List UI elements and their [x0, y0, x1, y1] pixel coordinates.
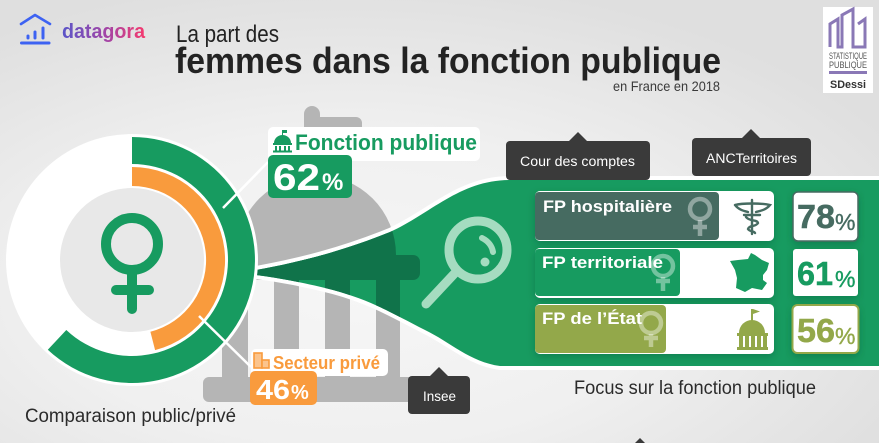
row: FP territoriale: FP territoriale — [542, 253, 663, 272]
tooltip: ANCTerritoires: ANCTerritoires — [706, 151, 797, 166]
title — [175, 21, 721, 94]
tooltip: cour des comptes — [506, 132, 650, 180]
logo: datagora: datagora — [62, 21, 146, 43]
row: FP hospitalière: FP hospitalière — [543, 197, 672, 216]
icon: office building — [254, 353, 269, 368]
panel: focus funnel — [215, 175, 879, 366]
row: FP de l'État — [535, 304, 858, 354]
row: FP hospitalière: % — [835, 209, 855, 235]
tooltip: cour des comptes: Cour des comptes — [520, 154, 635, 169]
row: FP de l'État: 56 — [797, 312, 835, 349]
title: femmes dans la fonction publique — [175, 40, 721, 81]
chart: donut public vs private — [6, 134, 258, 386]
label: secteur privé: Secteur privé — [273, 353, 380, 373]
tooltip: insee — [408, 367, 470, 414]
logo: statistique publique: PUBLIQUE — [829, 60, 867, 70]
icon: caduceus — [735, 200, 770, 234]
logo: statistique publique: SDessi — [830, 79, 866, 91]
row: FP de l'État: FP de l’État — [542, 309, 642, 328]
label: fonction publique: 62 — [273, 157, 320, 198]
logo: datagora — [21, 15, 146, 43]
row: FP territoriale — [535, 248, 858, 298]
label: secteur privé: 46 — [256, 374, 290, 405]
icon: female symbol — [106, 218, 158, 309]
row: FP hospitalière — [535, 191, 858, 241]
tooltip: ANCTerritoires — [692, 129, 811, 176]
icon: map of France — [730, 253, 769, 292]
title: La part des — [176, 21, 279, 48]
label: fonction publique: % — [322, 169, 343, 196]
row: FP hospitalière: 78 — [797, 198, 835, 235]
title: en France en 2018 — [613, 78, 720, 94]
building illustration — [203, 106, 421, 402]
label: fonction publique: Fonction publique — [295, 130, 477, 155]
tooltip tip: bottom edge — [635, 438, 645, 443]
row: FP de l'État: % — [835, 323, 855, 349]
icon: public building — [273, 130, 292, 152]
tooltip: insee: Insee — [423, 389, 456, 404]
caption: comparaison: Comparaison public/privé — [25, 406, 236, 427]
icon: capitol — [737, 309, 768, 350]
caption: focus: Focus sur la fonction publique — [574, 378, 816, 399]
label: secteur privé: % — [291, 382, 309, 404]
label: fonction publique — [223, 127, 480, 208]
icon: magnifying glass — [426, 221, 507, 304]
logo: statistique publique — [823, 7, 873, 93]
row: FP territoriale: % — [835, 266, 855, 292]
label: secteur privé — [199, 316, 388, 405]
row: FP territoriale: 61 — [797, 255, 833, 292]
